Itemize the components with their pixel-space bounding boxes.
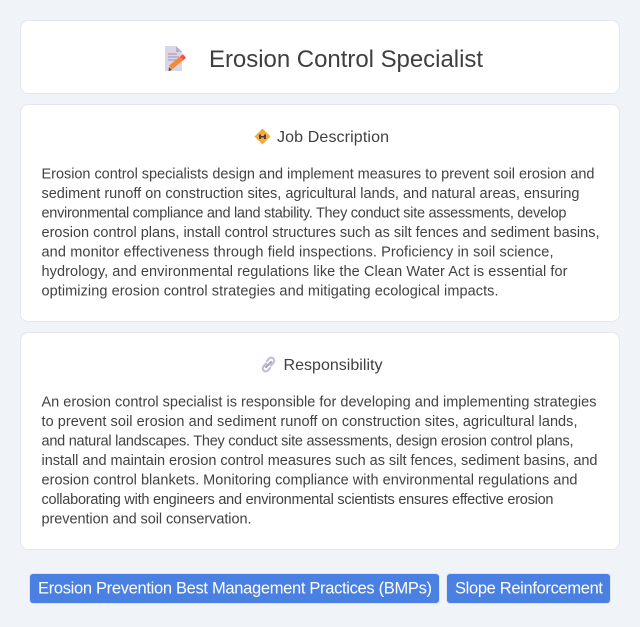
icon: diamond warning sign: [254, 128, 270, 144]
icon: chain link: [262, 356, 276, 372]
text block: job description: sediment runoff on construction sites, agricultural lands, and natural areas, ensuring: [42, 186, 580, 202]
text block: responsibility: collaborating with engineers and environmental scientists ensures effective erosion: [42, 492, 554, 508]
tag: erosion prevention BMPs: [30, 574, 439, 603]
text block: responsibility: [42, 395, 598, 528]
text block: responsibility: and natural landscapes. They conduct site assessments, design erosion control plans,: [42, 434, 574, 450]
text block: responsibility: install and maintain erosion control measures such as silt fences, sediment basins, and: [42, 453, 598, 469]
heading: responsibility: Responsibility: [284, 357, 382, 374]
tag: slope reinforcement: Slope Reinforcement: [455, 580, 603, 598]
tag: slope reinforcement: [447, 574, 610, 603]
panel: title card: [20, 20, 620, 94]
text block: job description: environmental compliance and land stability. They conduct site assessments, develop: [42, 206, 566, 222]
text block: job description: Erosion control specialists design and implement measures to prevent soil erosion and: [42, 167, 594, 183]
text block: job description: [42, 167, 600, 300]
panel: job description: [20, 104, 620, 322]
text block: responsibility: An erosion control specialist is responsible for developing and implementing strategies: [42, 395, 596, 411]
panel: responsibility: [20, 332, 620, 550]
text block: job description: hydrology, and environmental regulations like the Clean Water Act is essential for: [42, 264, 568, 280]
text block: job description: erosion control plans, install control structures such as silt fences and sediment basins,: [42, 225, 600, 241]
text block: job description: and monitor effectiveness through field inspections. Proficiency in soil science,: [42, 245, 554, 261]
text block: job description: optimizing erosion control strategies and mitigating ecological impacts.: [42, 284, 498, 300]
text block: responsibility: prevention and soil conservation.: [42, 512, 252, 528]
icon: document with pencil: [165, 46, 186, 71]
heading: job description: Job Description: [277, 129, 389, 146]
tag: erosion prevention BMPs: Erosion Prevention Best Management Practices (BMPs): [38, 580, 432, 598]
text block: responsibility: to prevent soil erosion and sediment runoff on construction sites, agricultural lands,: [42, 414, 578, 430]
text block: responsibility: erosion control blankets. Monitoring compliance with environmental regulations and: [42, 473, 578, 489]
title: Erosion Control Specialist: [209, 46, 483, 73]
